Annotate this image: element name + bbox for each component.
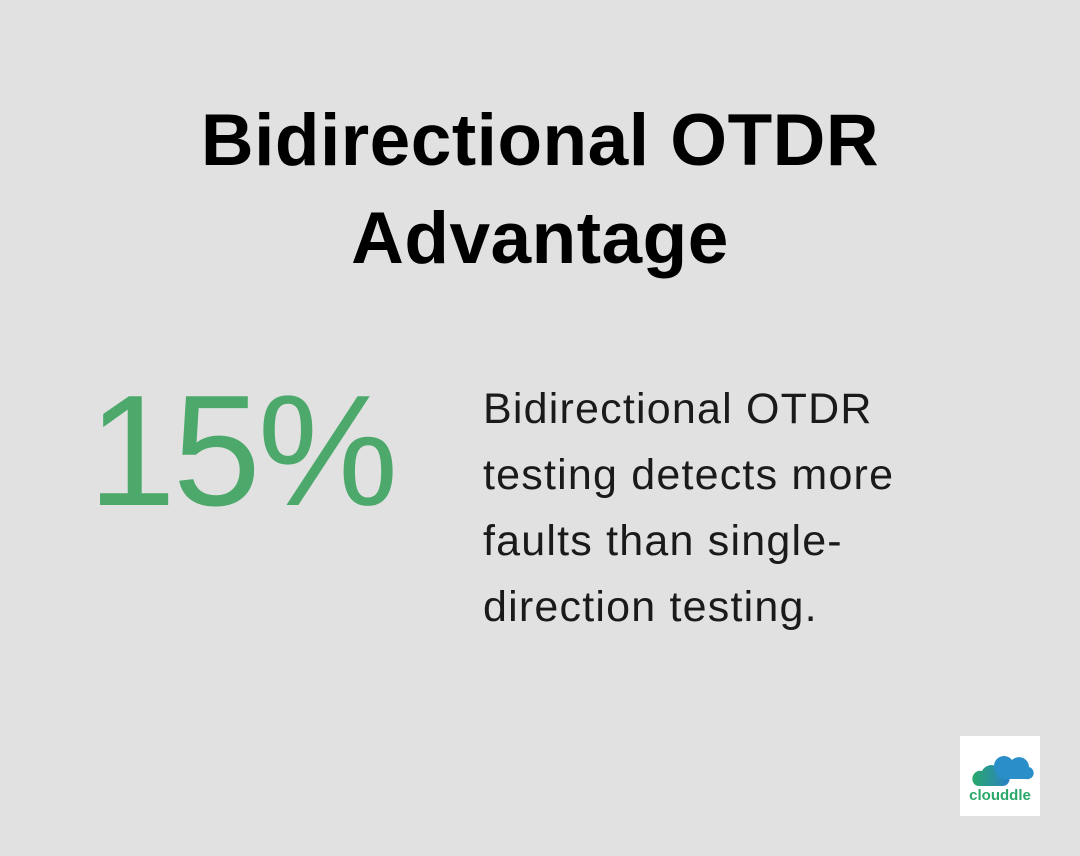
- title: Bidirectional OTDR: [201, 100, 879, 181]
- stat number: 15%: [88, 363, 395, 539]
- description text: [483, 385, 894, 631]
- logo: clouddle: clouddle: [969, 787, 1031, 804]
- title: Advantage: [351, 198, 729, 279]
- title: [201, 100, 879, 279]
- description text: faults than single-: [483, 517, 843, 565]
- description text: testing detects more: [483, 451, 894, 499]
- logo: clouddle: [960, 736, 1040, 816]
- description text: Bidirectional OTDR: [483, 385, 873, 433]
- description text: direction testing.: [483, 583, 818, 631]
